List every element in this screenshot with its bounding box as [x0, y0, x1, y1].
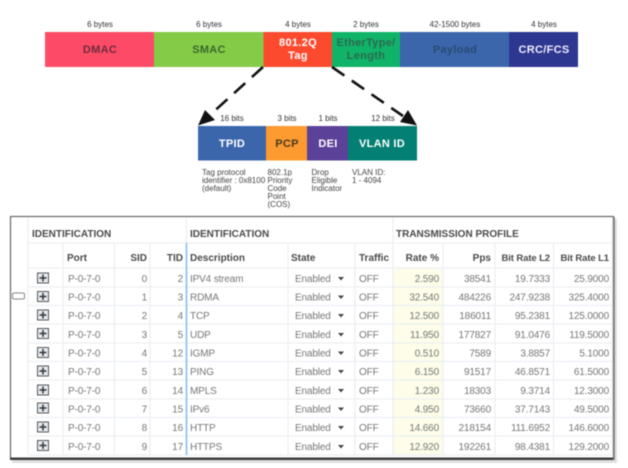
row 4: 177827: [459, 330, 492, 341]
row 7: 14: [172, 386, 184, 397]
row 6: 13: [172, 367, 184, 378]
column headers: Rate %: [406, 253, 439, 264]
row 4: 11.950: [410, 330, 440, 341]
row 7: MPLS: [190, 386, 217, 397]
row 8: 49.5000: [574, 404, 610, 416]
row 4: 5: [178, 330, 184, 341]
row 8: 73660: [464, 404, 492, 416]
row 2: Enabled: [295, 292, 331, 304]
field: PCP: [266, 114, 307, 209]
row 2: OFF: [359, 292, 379, 304]
row 10: OFF: [359, 442, 379, 453]
field: VLAN ID: VLAN ID:: [352, 168, 385, 177]
row 7: [38, 385, 610, 397]
row 2: [38, 292, 610, 304]
field: TPID: TPID: [219, 138, 245, 150]
row 2: RDMA: [190, 292, 219, 304]
row 8: Enabled: [295, 404, 331, 416]
column headers: Bit Rate L1: [560, 253, 610, 264]
row 10: 12.920: [409, 442, 440, 453]
field: DEI: 1 bits: [318, 114, 338, 123]
field: CRC/FCS: [509, 20, 578, 67]
row 9: 14.660: [409, 423, 440, 434]
row 4: OFF: [359, 330, 379, 341]
row 1: 0: [142, 274, 148, 285]
row 5: P-0-7-0: [68, 348, 101, 360]
row 3: TCP: [190, 311, 210, 322]
column headers: Pps: [473, 253, 491, 264]
field: SMAC: [154, 20, 264, 67]
row 4: P-0-7-0: [68, 330, 101, 341]
field: Payload: 42-1500 bytes: [430, 20, 480, 29]
row 9: P-0-7-0: [68, 423, 101, 434]
row 1: 2: [178, 274, 184, 285]
row 3: 12.500: [409, 311, 440, 322]
row 10: 192261: [459, 442, 492, 453]
field: SMAC: 6 bytes: [196, 20, 222, 29]
field: EtherType/Length: 2 bytes: [353, 20, 379, 29]
row 7: 18303: [464, 386, 492, 397]
row 3: [38, 310, 610, 322]
row 8: 15: [172, 404, 184, 416]
field: TPID: (default): [202, 184, 232, 193]
row 3: 4: [178, 311, 184, 322]
field: SMAC: SMAC: [192, 44, 226, 56]
group headers: IDENTIFICATION: [190, 229, 269, 240]
row 3: OFF: [359, 311, 379, 322]
row 9: [38, 422, 610, 434]
column headers: Description: [190, 253, 245, 264]
row 7: 6: [142, 386, 148, 397]
panel: ethernet frame: [45, 20, 578, 67]
field: EtherType/Length: Length: [347, 50, 385, 62]
row 1: Enabled: [295, 274, 331, 285]
field: VLAN ID: [348, 114, 417, 185]
row 5: 3.8857: [520, 348, 551, 360]
row 10: 9: [142, 442, 148, 453]
row 5: 0.510: [415, 348, 440, 360]
panel: stream table: [10, 216, 617, 463]
row 1: [38, 273, 610, 285]
field: DEI: DEI: [318, 138, 338, 150]
row 9: 111.6952: [511, 423, 551, 434]
group headers: [32, 229, 519, 240]
row 6: PING: [190, 367, 214, 378]
field: TPID: 16 bits: [220, 114, 244, 123]
row 8: 7: [142, 404, 148, 416]
row 4: 3: [142, 330, 148, 341]
field: Payload: [400, 20, 509, 67]
row selector icon: [12, 293, 24, 299]
row 7: 9.3714: [520, 386, 551, 397]
row 8: OFF: [359, 404, 379, 416]
row 2: P-0-7-0: [68, 292, 101, 304]
row 1: 19.7333: [515, 274, 551, 285]
row 6: Enabled: [295, 367, 331, 378]
field: PCP: Code: [268, 184, 287, 193]
field: PCP: 802.1p: [268, 168, 293, 177]
column headers: State: [291, 253, 316, 264]
column headers: Traffic: [359, 253, 389, 264]
field: DEI: Drop: [312, 168, 329, 177]
column headers: SID: [130, 253, 147, 264]
field: 802.1Q tag: Tag: [288, 50, 308, 62]
row 10: Enabled: [295, 442, 331, 453]
row 3: P-0-7-0: [68, 311, 101, 322]
row 7: Enabled: [295, 386, 331, 397]
field: CRC/FCS: 4 bytes: [531, 20, 557, 29]
row 6: 91517: [464, 367, 492, 378]
field: 802.1Q tag: 4 bytes: [285, 20, 311, 29]
field: TPID: identifier : 0x8100: [202, 176, 266, 185]
row 5: OFF: [359, 348, 379, 360]
panel: VLAN tag breakdown: [198, 114, 417, 209]
row 9: HTTP: [190, 423, 216, 434]
group headers: IDENTIFICATION: [32, 229, 111, 240]
row 2: 32.540: [409, 292, 440, 304]
row 1: 38541: [464, 274, 492, 285]
row 8: [38, 403, 610, 416]
field: EtherType/Length: EtherType/: [336, 37, 396, 49]
arrow: left expansion: [198, 67, 263, 126]
column headers: [67, 253, 610, 264]
field: DEI: [307, 114, 348, 193]
group headers: TRANSMISSION PROFILE: [396, 229, 519, 240]
field: VLAN ID: 1 - 4094: [352, 176, 382, 185]
field: DMAC: DMAC: [83, 44, 117, 56]
row 7: P-0-7-0: [68, 386, 101, 397]
row 1: P-0-7-0: [68, 274, 101, 285]
row 3: 125.0000: [568, 311, 610, 322]
row 10: 17: [172, 442, 184, 453]
row 10: [38, 440, 610, 453]
row 5: 12: [172, 348, 184, 360]
field: CRC/FCS: CRC/FCS: [518, 44, 570, 56]
field: TPID: Tag protocol: [202, 168, 246, 177]
row 3: 2: [142, 311, 148, 322]
row 10: 129.2000: [568, 442, 610, 453]
row 2: 325.4000: [568, 292, 610, 304]
row 1: 2.590: [415, 274, 440, 285]
row 6: 6.150: [415, 367, 440, 378]
row 10: 98.4381: [515, 442, 551, 453]
row 7: 1.230: [415, 386, 440, 397]
row 10: P-0-7-0: [68, 442, 101, 453]
field: VLAN ID: VLAN ID: [359, 138, 405, 150]
row 1: 25.9000: [574, 274, 610, 285]
field: PCP: Priority: [268, 176, 292, 185]
field: DMAC: 6 bytes: [87, 20, 113, 29]
row 9: OFF: [359, 423, 379, 434]
field: 802.1Q tag: [264, 20, 332, 67]
row 4: UDP: [190, 330, 211, 341]
row 4: [38, 328, 610, 341]
field: PCP: (COS): [268, 200, 290, 209]
row 2: 1: [142, 292, 148, 304]
row 1: OFF: [359, 274, 379, 285]
row 5: IGMP: [190, 348, 215, 360]
row 3: Enabled: [295, 311, 331, 322]
row 5: 5.1000: [579, 348, 610, 360]
row 5: [38, 348, 610, 360]
row 4: 91.0476: [515, 330, 551, 341]
row 10: HTTPS: [190, 442, 223, 453]
field: VLAN ID: 12 bits: [371, 114, 395, 123]
row 8: 37.7143: [515, 404, 551, 416]
field: DMAC: [45, 20, 154, 67]
row 4: 119.5000: [569, 330, 610, 341]
row 3: 95.2381: [515, 311, 551, 322]
row 5: 4: [142, 348, 148, 360]
row 6: 46.8571: [515, 367, 551, 378]
field: DEI: Eligible: [312, 176, 338, 185]
row 2: 247.9238: [509, 292, 551, 304]
row 6: [38, 366, 610, 378]
row 9: 146.6000: [568, 423, 610, 434]
row 2: 3: [178, 292, 184, 304]
row 9: Enabled: [295, 423, 331, 434]
field: PCP: PCP: [275, 138, 299, 150]
row 9: 16: [172, 423, 184, 434]
row 5: 7589: [469, 348, 492, 360]
row 7: OFF: [359, 386, 379, 397]
field: Payload: Payload: [433, 44, 477, 56]
row 1: IPV4 stream: [190, 274, 243, 285]
row 8: 4.950: [415, 404, 440, 416]
row 4: Enabled: [295, 330, 331, 341]
row 9: 8: [142, 423, 148, 434]
row 6: 5: [142, 367, 148, 378]
column headers: TID: [167, 253, 183, 264]
row 8: P-0-7-0: [68, 404, 101, 416]
field: EtherType/Length: [332, 20, 400, 67]
field: TPID: [198, 114, 266, 193]
row 2: 484226: [459, 292, 492, 304]
row 9: 218154: [459, 423, 492, 434]
row 7: 12.3000: [574, 386, 610, 397]
row 6: 61.5000: [574, 367, 610, 378]
field: DEI: Indicator: [312, 184, 343, 193]
row 6: OFF: [359, 367, 379, 378]
column headers: Bit Rate L2: [501, 253, 550, 264]
arrow: right expansion: [332, 67, 417, 126]
field: PCP: Point: [268, 192, 287, 201]
row 5: Enabled: [295, 348, 331, 360]
column headers: Port: [67, 253, 88, 264]
field: 802.1Q tag: 801.2Q: [279, 37, 317, 49]
row 6: P-0-7-0: [68, 367, 101, 378]
row 3: 186011: [459, 311, 492, 322]
field: PCP: 3 bits: [277, 114, 297, 123]
row 8: IPv6: [190, 404, 210, 416]
